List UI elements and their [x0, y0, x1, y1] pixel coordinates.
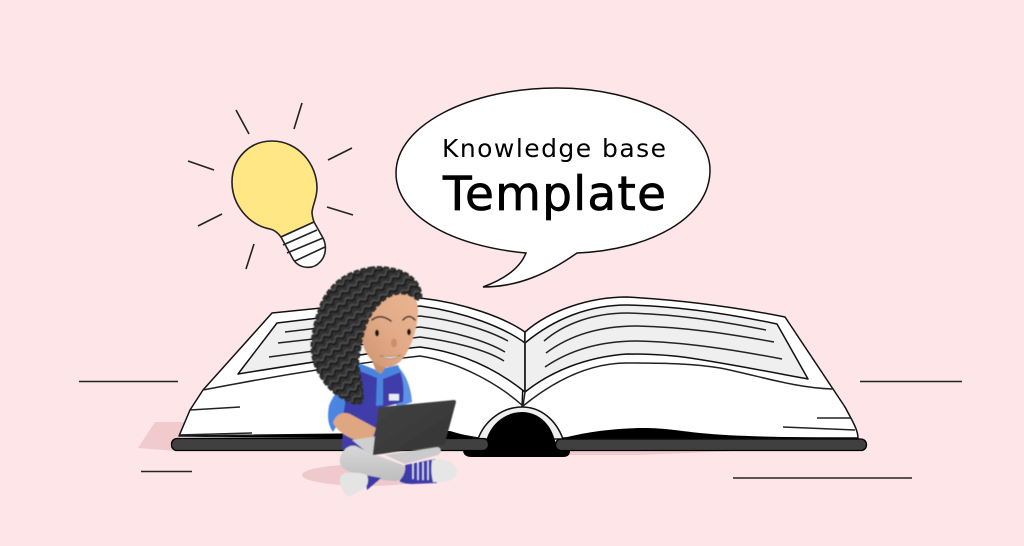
arm [333, 413, 376, 444]
far thigh [385, 447, 441, 464]
light bulb icon [188, 103, 353, 269]
hair [312, 267, 421, 404]
collar and shirt placket [355, 362, 401, 406]
neck [371, 358, 388, 374]
nose [391, 338, 397, 348]
black opening under spine [463, 445, 570, 457]
laptop base [352, 436, 390, 454]
heading: Knowledge base: Knowledge base [442, 134, 666, 163]
speech bubble [396, 88, 710, 287]
near thigh [340, 446, 405, 481]
base stripes [283, 230, 325, 261]
left shoe [340, 473, 381, 497]
right cover bar [556, 439, 866, 450]
eyes [375, 330, 379, 336]
left grey text area [238, 306, 525, 392]
left page block [179, 298, 525, 438]
eyebrows [372, 316, 415, 321]
name tag [389, 394, 399, 400]
mouth [380, 355, 401, 359]
character: girl with laptop [312, 267, 457, 497]
ground shadows [138, 422, 760, 486]
spine arch [478, 407, 563, 439]
bulb screw base [281, 222, 325, 267]
heading: Template: Template [442, 167, 666, 222]
right page block [522, 297, 858, 438]
right grey text area [525, 305, 808, 392]
right shoe [400, 459, 457, 484]
vest [342, 366, 404, 452]
black shadow below right pages [563, 428, 858, 438]
face [362, 293, 418, 367]
laptop lid [373, 400, 456, 455]
light rays [188, 103, 353, 269]
left sleeve [328, 392, 356, 432]
bulb glass [232, 141, 317, 237]
page text lines [179, 313, 855, 435]
left cover bar [172, 438, 488, 450]
open book [172, 297, 866, 457]
right sleeve [396, 367, 412, 408]
black shadow below left pages [179, 431, 478, 439]
decorative ground lines [79, 382, 962, 478]
